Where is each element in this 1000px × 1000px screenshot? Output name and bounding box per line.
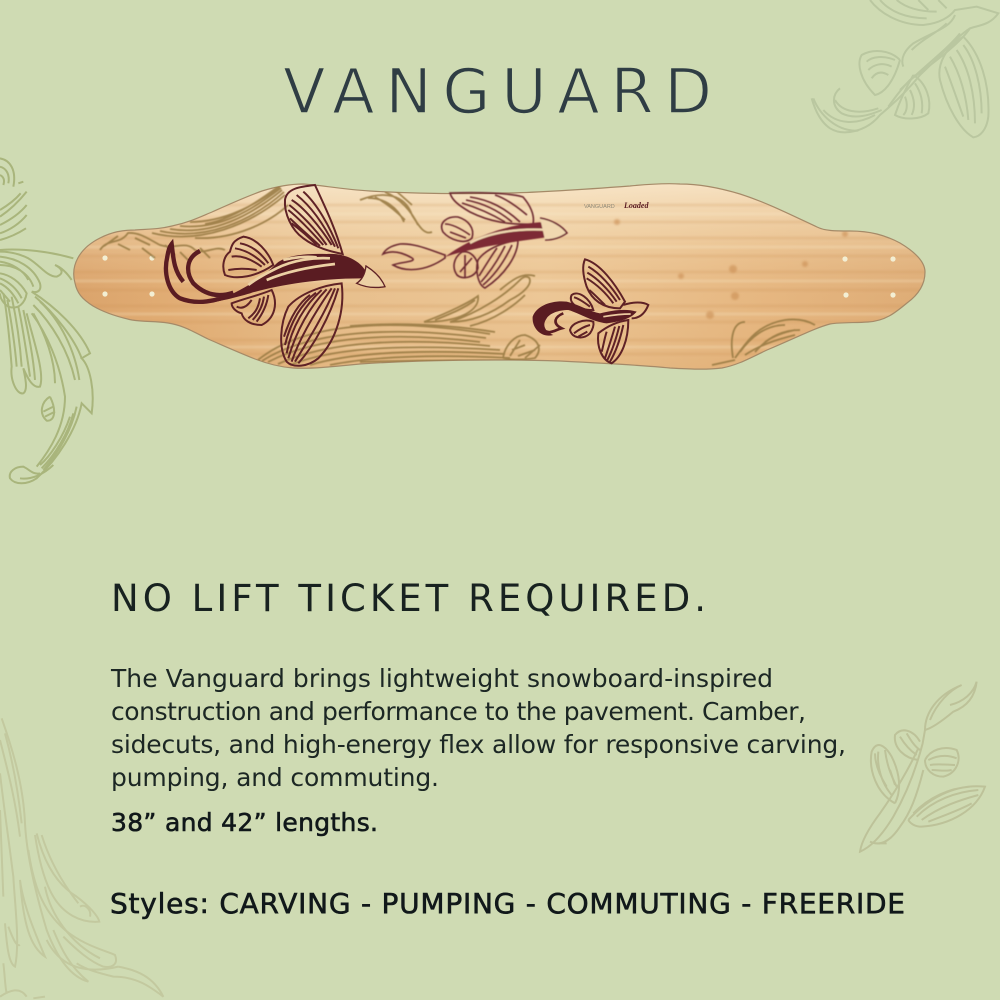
description paragraph: construction and performance to the pavement. Camber, bbox=[111, 697, 806, 726]
middle fish body bbox=[445, 222, 562, 257]
decoration: bottom-left ornament bbox=[0, 718, 163, 998]
middle fish tail bbox=[383, 244, 445, 270]
deck logo text: VANGUARD bbox=[584, 204, 615, 210]
middle fish wings bbox=[450, 193, 533, 224]
heading: NO LIFT TICKET REQUIRED. bbox=[111, 577, 706, 620]
deck outline and bamboo bbox=[74, 184, 924, 368]
small fish body bbox=[533, 301, 637, 336]
middle fish bbox=[383, 193, 567, 288]
longboard deck bbox=[73, 183, 926, 370]
fish head bbox=[357, 266, 385, 287]
decoration: top-right flying fish bbox=[812, 0, 998, 137]
description paragraph bbox=[110, 664, 846, 792]
title: VANGUARD bbox=[283, 55, 712, 128]
decoration: bottom-right flying fish bbox=[860, 682, 985, 852]
fish tail bbox=[166, 244, 233, 302]
small fish wings bbox=[583, 259, 625, 308]
lengths note: 38” and 42” lengths. bbox=[111, 808, 378, 837]
large fish bbox=[166, 185, 385, 366]
deck logo text: Loaded bbox=[623, 201, 649, 210]
small fish bbox=[533, 259, 648, 363]
mounting holes bbox=[102, 255, 896, 298]
decoration: left ornament bbox=[0, 158, 93, 483]
fish wings bbox=[223, 185, 343, 366]
description paragraph: pumping, and commuting. bbox=[111, 763, 439, 792]
description paragraph: sidecuts, and high-energy flex allow for responsive carving, bbox=[111, 730, 846, 759]
description paragraph: The Vanguard brings lightweight snowboard-inspired bbox=[110, 664, 773, 693]
styles list: Styles: CARVING - PUMPING - COMMUTING - FREERIDE bbox=[110, 887, 905, 920]
fish body bbox=[213, 254, 366, 302]
gold wave ornaments on deck bbox=[100, 186, 815, 365]
deck logo text bbox=[584, 201, 649, 210]
